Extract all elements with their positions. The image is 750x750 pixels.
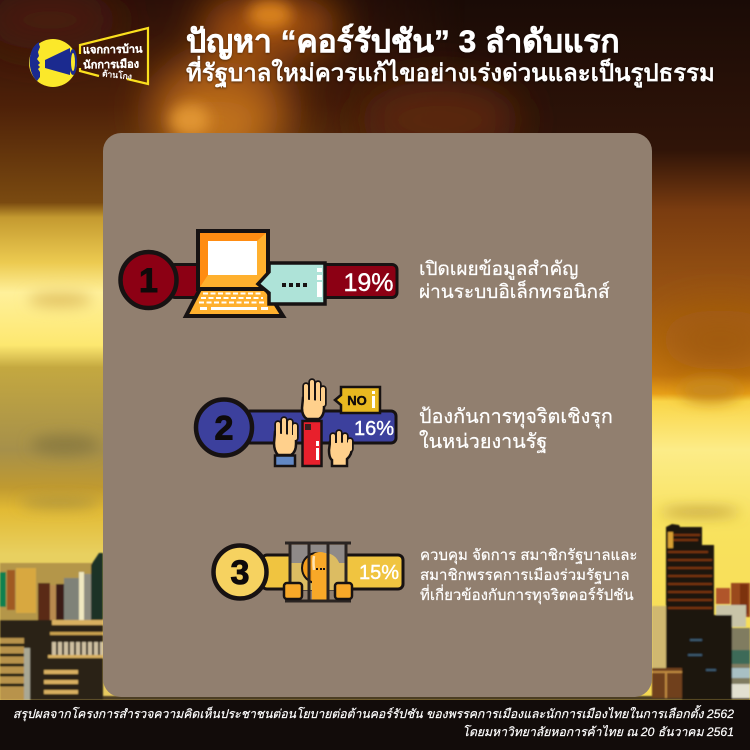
label: item 1: เปิดเผยข้อมูลสำคัญ xyxy=(419,259,578,280)
logo xyxy=(29,26,150,87)
item 3 badge and bar: 15% xyxy=(359,562,399,584)
footer source note xyxy=(13,705,734,738)
label: item 2: ในหน่วยงานรัฐ xyxy=(419,431,547,453)
footer band xyxy=(0,700,750,750)
icon: NO tag xyxy=(335,387,380,413)
item 3 badge and bar xyxy=(214,546,403,598)
icon: megaphone head xyxy=(29,39,77,87)
subtitle: ที่รัฐบาลใหม่ควรแก้ไขอย่างเร่งด่วนและเป็นรูปธรรม xyxy=(186,60,715,87)
label: item 1 xyxy=(419,259,610,303)
item 2 badge and bar xyxy=(196,400,396,456)
icon: NO tag: NO xyxy=(347,393,367,408)
label: item 2 xyxy=(419,406,613,454)
footer source note: สรุปผลจากโครงการสำรวจความคิดเห็นประชาชนต่อนโยบายต่อต้านคอร์รัปชัน ของพรรคการเมืองและนักการเมืองไทยในการเลือกตั้ง 2562 xyxy=(13,707,734,721)
item 1 badge and bar: 19% xyxy=(343,269,394,297)
logo text: นักการเมือง xyxy=(83,59,139,72)
icon: prisoner behind bars xyxy=(284,543,352,601)
item 1 badge and bar xyxy=(120,252,397,308)
item 2 badge and bar: 16% xyxy=(354,418,394,440)
icon: raised hands xyxy=(274,382,352,466)
logo text: แจกการบ้าน xyxy=(83,44,143,57)
item 1 badge and bar: 1 xyxy=(139,262,158,300)
icon: speech bubble xyxy=(258,263,325,304)
logo subtext: ต้านโกง xyxy=(102,68,132,82)
panel: main content card xyxy=(103,133,652,697)
label: item 3: ควบคุม จัดการ สมาชิกรัฐบาลและ xyxy=(420,547,637,564)
footer source note: โดยมหาวิทยาลัยหอการค้าไทย ณ 20 ธันวาคม 2561 xyxy=(462,724,734,738)
title: ปัญหา “คอร์รัปชัน” 3 ลำดับแรก xyxy=(186,23,620,59)
label: item 3: สมาชิกพรรคการเมืองร่วมรัฐบาล xyxy=(420,567,630,584)
label: item 1: ผ่านระบบอิเล็กทรอนิกส์ xyxy=(419,282,610,303)
label: item 3: ที่เกี่ยวข้องกับการทุจริตคอร์รัปชัน xyxy=(420,587,634,604)
item 3 badge and bar: 3 xyxy=(231,554,249,592)
logo text xyxy=(83,43,143,72)
item 2 badge and bar: 2 xyxy=(215,410,233,448)
label: item 3 xyxy=(420,547,637,604)
icon: laptop computer xyxy=(186,231,283,316)
label: item 2: ป้องกันการทุจริตเชิงรุก xyxy=(419,406,613,428)
frame: logo bracket xyxy=(80,28,148,84)
